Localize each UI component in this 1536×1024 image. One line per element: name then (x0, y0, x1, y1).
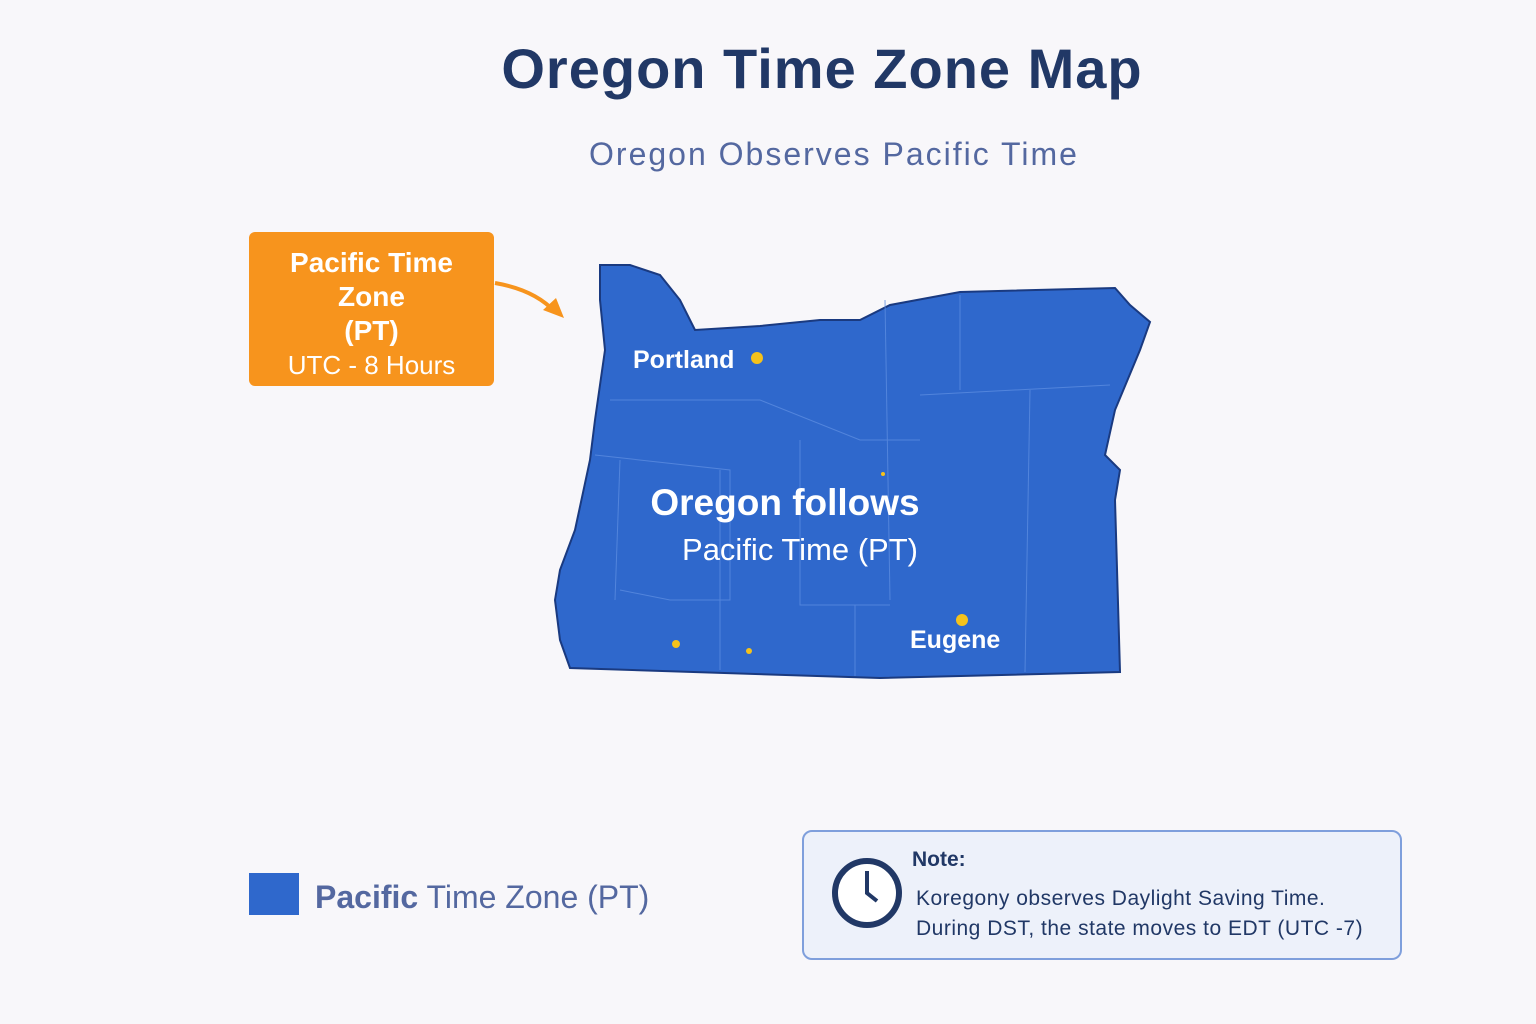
legend: Pacific Time Zone (PT) (315, 879, 649, 915)
callout: Pacific Time Zone: (PT) (344, 315, 399, 346)
arrow (495, 283, 564, 318)
note box (802, 830, 1402, 960)
map center text: Oregon follows (650, 482, 920, 523)
city dots (672, 352, 968, 654)
note box: Koregony observes Daylight Saving Time. (916, 887, 1325, 910)
map center text (650, 482, 920, 567)
note box: During DST, the state moves to EDT (UTC -7) (916, 917, 1363, 940)
map center text: Pacific Time (PT) (682, 532, 918, 567)
callout: Pacific Time Zone: Zone (338, 281, 405, 312)
callout: Pacific Time Zone (249, 232, 494, 386)
label: Eugene: Eugene (910, 626, 1000, 654)
subtitle: Oregon Observes Pacific Time (589, 136, 1079, 172)
callout: Pacific Time Zone: Pacific Time (290, 247, 453, 278)
note box: Note: (912, 848, 966, 871)
title: Oregon Time Zone Map (501, 37, 1143, 100)
icon: clock (832, 858, 902, 928)
label: Portland: Portland (633, 346, 734, 374)
callout: Pacific Time Zone: UTC - 8 Hours (288, 350, 455, 380)
